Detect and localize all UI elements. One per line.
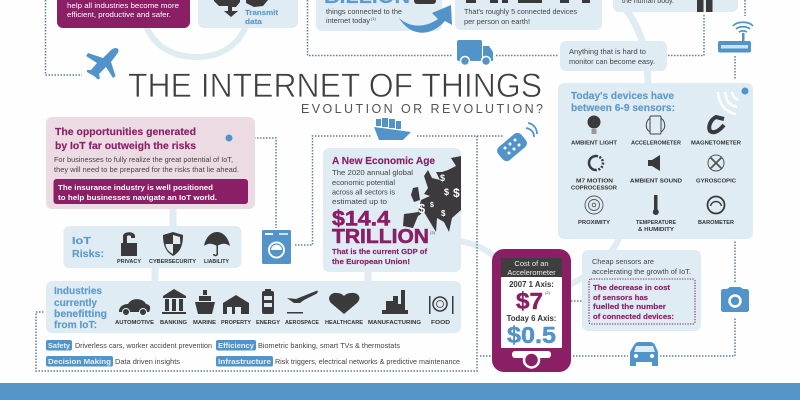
panel: IoT risks: IoT: [72, 236, 91, 247]
panel: sensors: MAGNETOMETER: [691, 140, 741, 146]
panel: cheap sensors: of sensors has: [593, 293, 648, 302]
panel: new economic age: across all sectors is: [332, 188, 395, 196]
panel: opportunities and risks: they will need to be prepared for the risks that lie ahead.: [54, 165, 239, 174]
panel: new economic age: [323, 148, 461, 272]
panel: sensors: BAROMETER: [698, 220, 734, 226]
icon: umbrella: [204, 232, 230, 256]
benefit: decision making: Data driven insights: [115, 357, 180, 366]
panel: sensors: AMBIENT LIGHT: [571, 140, 618, 146]
panel: industries benefitting: HEALTHCARE: [325, 320, 363, 326]
icon: magnet: [709, 117, 724, 132]
icon: motion coprocessor: [589, 156, 603, 170]
benefit: decision making: Decision Making: [48, 357, 111, 366]
icon: car: [630, 342, 658, 366]
panel: IoT risks: Risks:: [72, 249, 104, 260]
icon: food: [429, 296, 454, 314]
panel: industries purple callout: help all industries become more: [67, 1, 179, 10]
panel: cheap sensors: of connected devices:: [593, 312, 674, 321]
icon: privacy lock: [121, 232, 137, 256]
panel: sensors: ACCELEROMETER: [631, 140, 681, 146]
icon: accelerometer: [646, 116, 665, 134]
panel: transmit data: Transmit: [245, 8, 279, 17]
panel: phone cost of accelerometer: $0.5: [507, 322, 556, 348]
panel: new economic age: A New Economic Age: [332, 155, 435, 167]
panel: industries benefitting: ENERGY: [256, 320, 280, 326]
icon: airplane: [86, 48, 119, 80]
panel: opportunities and risks: The opportunities generated: [55, 127, 196, 138]
panel: connected devices per person: That's roughly 5 connected devices: [464, 7, 577, 16]
panel: sensors: & HUMIDITY: [638, 227, 674, 233]
panel: industries benefitting: from IoT:: [54, 320, 97, 331]
panel: phone cost of accelerometer: Today 6 Axis:: [507, 314, 556, 323]
panel: transmit data: [198, 0, 298, 28]
panel: sensors: Today's devices have: [571, 91, 674, 102]
icon: thermometer: [653, 195, 659, 215]
subtitle: EVOLUTION OR REVOLUTION?: [301, 102, 543, 116]
connector ribbons: [146, 8, 648, 287]
map: Europe: $: [418, 201, 426, 216]
panel: industries benefitting: FOOD: [431, 320, 450, 326]
panel: billion things connected: things connected to the: [326, 7, 402, 16]
benefit: safety: [46, 340, 212, 350]
benefit: infrastructure: Infrastructure: [218, 357, 271, 366]
panel: industries benefitting: [46, 281, 461, 333]
icon: banking: [162, 289, 186, 314]
callout: hard to monitor: [560, 41, 667, 71]
panel: billion things connected: internet today: [326, 16, 370, 25]
map: Europe: [403, 156, 461, 232]
benefit: efficiency: [216, 340, 400, 350]
panel: billion things connected: [316, 0, 442, 31]
icon: energy: [262, 289, 274, 314]
benefit: infrastructure: [216, 356, 460, 366]
title: THE INTERNET OF THINGS: [128, 67, 542, 105]
icon: remote control: [495, 123, 537, 163]
panel: opportunities and risks: For businesses to fully realize the great potential of IoT,: [54, 155, 233, 164]
panel: phone cost of accelerometer: (2): [545, 290, 551, 295]
arrow: curved blue: [399, 5, 452, 33]
icon: proximity: [585, 196, 603, 214]
panel: sensors: PROXIMITY: [578, 220, 610, 226]
panel: IoT risks: [64, 226, 242, 268]
icon: property: [223, 295, 249, 314]
panel: phone cost of accelerometer: Accelerometer: [507, 268, 556, 277]
panel: phone cost of accelerometer: 2007 1 Axis:: [509, 280, 554, 289]
benefit: decision making: [46, 356, 180, 366]
panel: opportunities and risks: The insurance industry is well positioned: [58, 183, 213, 192]
icon: washing machine: [262, 230, 291, 264]
panel: industries purple callout: [57, 0, 190, 28]
panel: human body: [613, 0, 738, 12]
panel: industries purple callout: efficient, productive and safer.: [67, 10, 171, 19]
icon: aerospace: [287, 291, 318, 314]
panel: opportunities and risks: to help businesses navigate an IoT world.: [58, 193, 217, 202]
panel: cheap sensors: [582, 250, 701, 331]
panel: new economic age: $14.4: [332, 208, 390, 230]
map: Europe: $: [444, 187, 449, 197]
benefit: safety: Driverless cars, worker accident prevention: [75, 341, 212, 350]
panel: industries benefitting: benefitting: [54, 309, 107, 320]
panel: IoT risks: PRIVACY: [117, 259, 141, 265]
icon: marine: [195, 290, 215, 314]
benefit: infrastructure: Risk triggers, electrical networks & predictive maintenance: [275, 357, 460, 366]
panel: new economic age: TRILLION: [332, 225, 429, 248]
panel: industries benefitting: AEROSPACE: [285, 320, 319, 326]
footer band: [0, 383, 800, 400]
benefit: safety: Safety: [48, 341, 70, 350]
panel: industries benefitting: currently: [54, 298, 97, 309]
panel: industries benefitting: Industries: [54, 286, 102, 297]
icon: camera: [721, 287, 749, 312]
panel: industries benefitting: PROPERTY: [221, 320, 251, 326]
map: Europe: $: [440, 173, 445, 183]
panel: cheap sensors: The decrease in cost: [593, 283, 670, 292]
panel: connected devices per person: per person on earth!: [464, 17, 530, 26]
panel: new economic age: The 2020 annual global: [332, 168, 413, 177]
icon: barometer: [708, 196, 724, 214]
panel: transmit data: data: [245, 17, 263, 26]
callout: hard to monitor: monitor can become easy.: [569, 57, 655, 66]
panel: billion things connected: (1): [371, 16, 377, 21]
icon: ambient light: [588, 116, 600, 134]
icon: router: [718, 22, 753, 52]
panel: opportunities and risks: by IoT far outweigh the risks: [55, 141, 196, 152]
panel: cheap sensors: accelerating the growth of IoT.: [592, 267, 691, 276]
panel: new economic age: (3): [430, 230, 436, 235]
panel: IoT risks: LIABILITY: [204, 259, 229, 265]
icon: gyroscope: [708, 155, 724, 171]
icon: cargo ship: [374, 118, 411, 140]
map: Europe: $: [441, 209, 446, 218]
panel: cheap sensors: fuelled the number: [593, 302, 666, 311]
icon: ambient sound: [648, 155, 660, 171]
benefit: efficiency: Biometric banking, smart TVs & thermostats: [258, 341, 400, 350]
map: Europe: $: [430, 202, 434, 209]
icon: healthcare: [329, 293, 359, 314]
panel: phone cost of accelerometer: [492, 249, 571, 372]
panel: phone cost of accelerometer: Cost of an: [514, 259, 549, 268]
panel: sensors: COPROCESSOR: [571, 186, 617, 192]
panel: opportunities and risks: [46, 117, 255, 209]
panel: new economic age: That is the current GDP of: [332, 247, 427, 256]
icon: truck: [457, 40, 493, 66]
icon: manufacturing: [382, 290, 408, 314]
panel: phone cost of accelerometer: $7: [516, 288, 543, 314]
panel: sensors: M7 MOTION: [576, 178, 613, 184]
panel: connected devices per person: [455, 0, 602, 30]
panel: new economic age: economic potential: [332, 178, 395, 187]
icon: automotive: [119, 299, 150, 316]
panel: sensors: AMBIENT SOUND: [630, 178, 682, 184]
panel: industries benefitting: AUTOMOTIVE: [115, 320, 154, 326]
panel: new economic age: the European Union!: [332, 257, 410, 266]
panel: sensors: between 6-9 sensors:: [571, 103, 675, 114]
map: Europe: $: [453, 186, 460, 200]
benefit: efficiency: Efficiency: [218, 341, 254, 350]
panel: sensors: GYROSCOPIC: [696, 178, 736, 184]
panel: sensors: [558, 83, 753, 239]
panel: sensors: TEMPERATURE: [636, 220, 676, 226]
panel: industries benefitting: BANKING: [160, 320, 187, 326]
panel: new economic age: estimated up to: [332, 197, 387, 206]
panel: industries benefitting: MARINE: [193, 320, 216, 326]
panel: industries benefitting: MANUFACTURING: [368, 320, 421, 326]
callout: hard to monitor: Anything that is hard to: [569, 47, 646, 56]
icon: cybersecurity shield: [163, 232, 183, 256]
panel: cheap sensors: Cheap sensors are: [592, 257, 654, 266]
panel: IoT risks: CYBERSECURITY: [149, 259, 196, 265]
